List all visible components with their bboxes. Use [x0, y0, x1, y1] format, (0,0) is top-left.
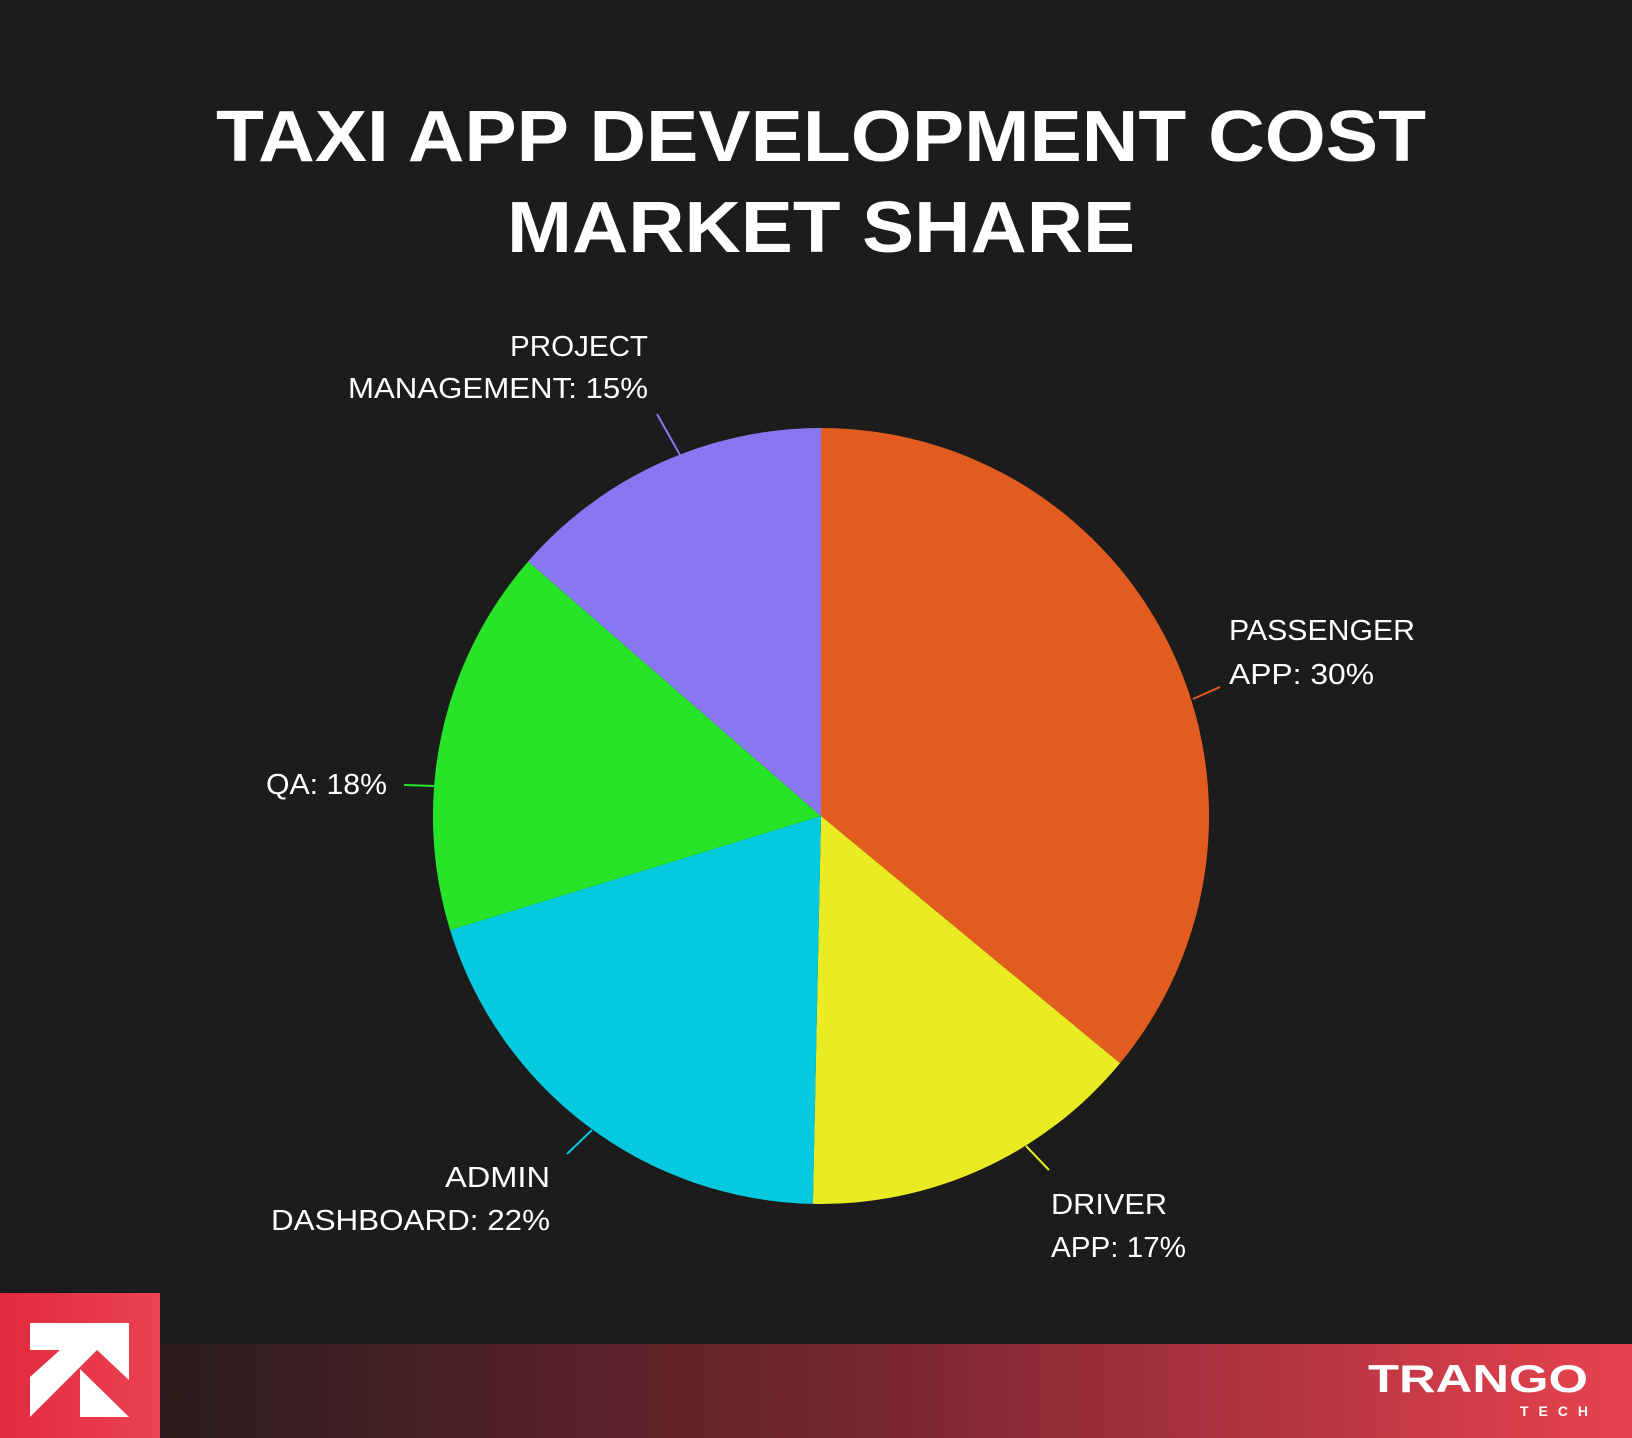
label: driver app [1026, 1146, 1186, 1264]
label: passenger app [1193, 615, 1415, 699]
label: project management [348, 331, 680, 455]
slice: project management [528, 428, 821, 816]
pie chart [433, 428, 1209, 1204]
slice: passenger app [821, 428, 1209, 1063]
slice: admin dashboard [450, 816, 821, 1204]
slice: QA [433, 561, 821, 930]
label: driver app: APP: 17% [1051, 1232, 1186, 1264]
brand logo text: TECH [1520, 1403, 1588, 1419]
title: TAXI APP DEVELOPMENT COST [216, 97, 1426, 177]
label: admin dashboard [271, 1130, 592, 1237]
icon: logo square [0, 1293, 160, 1438]
title [216, 97, 1426, 268]
brand logo text [1368, 1358, 1588, 1419]
slice: driver app [813, 816, 1120, 1204]
brand logo text: TRANGO [1368, 1358, 1588, 1401]
label: QA: QA: 18% [266, 769, 387, 801]
footer bar [160, 1344, 1632, 1438]
label: project management: PROJECT [510, 331, 648, 363]
title: MARKET SHARE [507, 188, 1135, 268]
label: passenger app: PASSENGER [1229, 615, 1415, 647]
label: admin dashboard: ADMIN [445, 1162, 550, 1194]
label: driver app: DRIVER [1051, 1189, 1167, 1221]
label: passenger app: APP: 30% [1229, 659, 1374, 691]
label: admin dashboard: DASHBOARD: 22% [271, 1205, 550, 1237]
label: project management: MANAGEMENT: 15% [348, 373, 648, 405]
